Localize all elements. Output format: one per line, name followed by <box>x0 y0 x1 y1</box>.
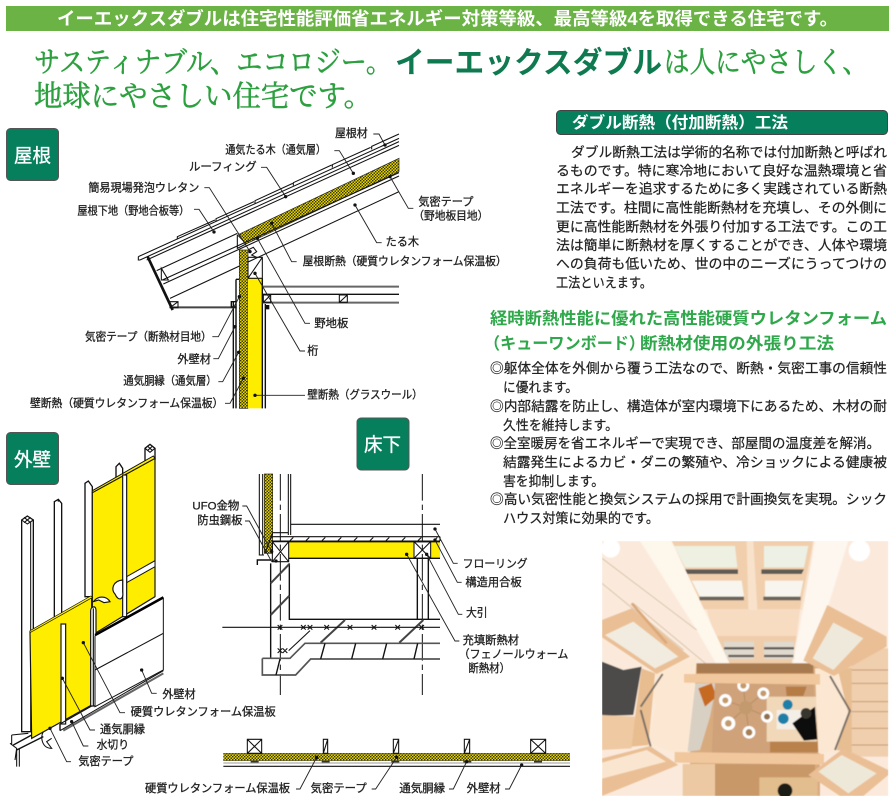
text block: benefit list <box>490 360 887 526</box>
text block: double insulation description: エネルギーを追求するために多く実践されている断熱 <box>556 180 887 196</box>
badge: roof <box>6 128 58 180</box>
underfloor labels: 防虫鋼板 <box>197 513 242 527</box>
wall plan labels <box>145 781 501 795</box>
text block: benefit list: 害を抑制します。 <box>503 473 604 489</box>
roof labels: 桁 <box>307 344 318 358</box>
badge: roof: 屋根 <box>14 145 51 167</box>
text block: double insulation description: ダブル断熱工法は学術的名称では付加断熱と呼ばれ <box>571 144 887 160</box>
roof labels: 屋根材 <box>335 126 368 140</box>
exterior wall labels: 通気胴縁 <box>100 722 146 736</box>
underfloor labels: UFO金物 <box>192 499 239 513</box>
roof labels: たる木 <box>386 236 419 249</box>
roof labels: 通気たる木（通気層） <box>225 143 326 157</box>
underfloor labels: フローリング <box>463 556 528 570</box>
diagram: roof section <box>30 126 507 410</box>
roof labels: （野地板目地） <box>413 209 488 223</box>
underfloor labels: 充填断熱材 <box>463 633 519 647</box>
underfloor labels: 大引 <box>466 605 488 619</box>
roof labels: 気密テープ（断熱材目地） <box>85 329 212 343</box>
exterior wall labels <box>78 687 276 768</box>
badge: underfloor: 床下 <box>364 434 401 456</box>
underfloor labels <box>192 499 568 675</box>
text block: benefit list: 結露発生によるカビ・ダニの繁殖や、冷ショックによる健康被 <box>503 454 887 470</box>
wall plan labels: 硬質ウレタンフォーム保温板 <box>145 781 290 795</box>
upper windows <box>667 541 813 663</box>
heading: exterior insulation: 断熱材使用の外張り工法 <box>640 334 835 353</box>
exterior wall labels: 硬質ウレタンフォーム保温板 <box>131 705 276 719</box>
text block: double insulation description <box>556 144 887 290</box>
text block: benefit list: ハウス対策に効果的です。 <box>503 510 659 526</box>
heading: exterior insulation: 経時断熱性能に優れた高性能硬質ウレタンフォーム <box>490 308 887 328</box>
diagram: exterior wall isometric <box>10 444 276 768</box>
leader lines <box>194 134 413 403</box>
exterior wall labels: 外壁材 <box>162 687 196 701</box>
text block: benefit list: に優れます。 <box>503 379 578 395</box>
text block: double insulation description: 法は簡単に断熱材を厚くすることができ、人体や環境 <box>556 237 887 253</box>
wall plan labels: 気密テープ <box>311 781 367 795</box>
text block: benefit list: 久性を維持します。 <box>503 417 618 433</box>
badge: exterior wall <box>6 432 58 484</box>
roof labels: 壁断熱（グラスウール） <box>307 388 423 402</box>
exterior wall labels: 水切り <box>97 739 129 752</box>
badge: exterior wall: 外壁 <box>14 449 51 471</box>
headline: 地球にやさしい住宅です。 <box>34 80 372 113</box>
headline <box>34 46 868 113</box>
roof labels: ルーフィング <box>189 159 257 173</box>
roof labels <box>30 126 507 410</box>
headline: サスティナブル、エコロジー。 <box>34 47 392 79</box>
wall plan labels: 通気胴縁 <box>399 781 446 795</box>
folding panels <box>601 539 888 796</box>
leader lines <box>296 756 523 789</box>
leader lines <box>48 641 157 762</box>
curtains <box>602 541 848 664</box>
heading: double insulation method: ダブル断熱（付加断熱）工法 <box>572 113 788 132</box>
left and right walls <box>602 648 888 757</box>
text block: double insulation description: 工法といえます。 <box>556 274 652 290</box>
text block: double insulation description: への負荷も低いため、世の中のニーズにうってつけの <box>556 256 887 272</box>
text block: benefit list: ◎躯体全体を外側から覆う工法なので、断熱・気密工事の信頼性 <box>490 360 887 376</box>
text block: benefit list: ◎内部結露を防止し、構造体が室内環境下にあるため、木材の耐 <box>490 398 887 414</box>
roof labels: 屋根下地（野地合板等） <box>77 204 189 218</box>
text block: double insulation description: 更に高性能断熱材を外張り付加する工法です。この工 <box>556 218 887 234</box>
pendant lamp <box>719 680 773 739</box>
headline: イーエックスダブル <box>395 46 662 80</box>
roof labels: 壁断熱（硬質ウレタンフォーム保温板） <box>30 396 223 410</box>
room below <box>683 663 820 798</box>
headline: は人にやさしく、 <box>664 47 868 79</box>
text block: benefit list: ◎高い気密性能と換気システムの採用で計画換気を実現。シック <box>490 491 887 507</box>
roof labels: 外壁材 <box>177 352 211 366</box>
roof labels: 通気胴縁（通気層） <box>123 374 217 388</box>
top banner <box>6 6 889 31</box>
roof labels: 野地板 <box>314 316 348 330</box>
wall plan labels: 外壁材 <box>467 781 501 795</box>
underfloor labels: 構造用合板 <box>465 575 522 589</box>
top banner: イーエックスダブルは住宅性能評価省エネルギー対策等級、最高等級4を取得できる住宅です。 <box>57 8 838 29</box>
heading: double insulation method <box>556 110 888 134</box>
roof labels: 屋根断熱（硬質ウレタンフォーム保温板） <box>303 254 507 268</box>
photo: interior atrium from above <box>601 539 888 798</box>
heading: exterior insulation: （キューワンボード） <box>484 334 645 353</box>
text block: double insulation description: るものです。特に寒冷地において良好な温熱環境と省 <box>556 162 887 178</box>
text block: benefit list: ◎全室暖房を省エネルギーで実現でき、部屋間の温度差を解消。 <box>490 435 880 451</box>
diagram: wall plan section <box>145 739 570 795</box>
heading: exterior insulation <box>484 308 887 353</box>
roof labels: 気密テープ <box>418 195 474 209</box>
badge: underfloor <box>357 418 409 470</box>
leader lines <box>242 506 462 641</box>
exterior wall labels: 気密テープ <box>78 754 134 768</box>
roof labels: 簡易現場発泡ウレタン <box>88 180 199 194</box>
text block: double insulation description: 工法です。柱間に高性能断熱材を充填し、その外側に <box>556 200 887 216</box>
underfloor labels: 断熱材） <box>468 661 510 675</box>
underfloor labels: （フェノールウォーム <box>459 648 568 661</box>
diagram: underfloor section <box>192 474 568 695</box>
beams <box>675 674 824 765</box>
